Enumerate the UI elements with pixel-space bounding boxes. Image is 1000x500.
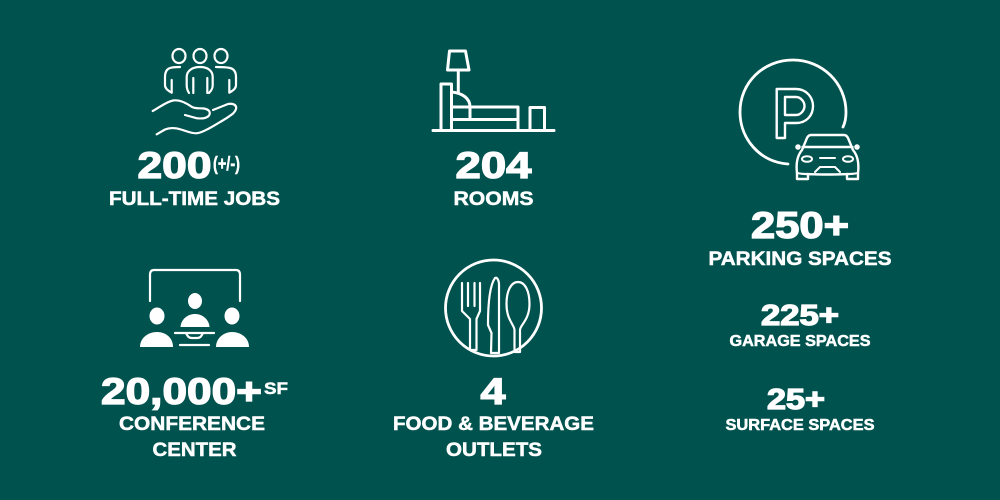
stat: 25+ surface: 25+ [767, 384, 825, 416]
stat: 225+ garage: 225+ [761, 300, 839, 332]
icon: parking circle with car [740, 60, 859, 179]
stat: 20,000+ SF: SF [264, 379, 288, 398]
label: conference center [119, 414, 265, 461]
stat: 204 rooms: 204 [456, 145, 532, 186]
icon: people over open hand [153, 49, 236, 134]
panel: full-time jobs [109, 49, 280, 210]
panel: conference center [101, 270, 288, 461]
stat: 200 jobs [138, 145, 240, 186]
icon: conference table with screen [140, 270, 249, 347]
label: full-time jobs: FULL-TIME JOBS [109, 189, 280, 210]
label: food and beverage outlets: OUTLETS [446, 440, 542, 461]
label: conference center: CONFERENCE [119, 414, 265, 435]
label: food and beverage outlets [393, 414, 594, 461]
label: parking spaces: PARKING SPACES [708, 249, 892, 270]
icon: bed with lamp and nightstand [433, 51, 554, 130]
stat: 200 jobs: (+/-) [213, 153, 240, 175]
panel: food and beverage [393, 260, 594, 461]
panel: rooms [433, 51, 554, 210]
stat: 250+ parking: 250+ [751, 205, 849, 246]
label: rooms: ROOMS [454, 189, 534, 210]
icon: plate with fork, knife, spoon [446, 260, 542, 356]
stat: 20,000+ SF: 20,000+ [101, 371, 262, 412]
label: conference center: CENTER [152, 440, 237, 461]
label: food and beverage outlets: FOOD & BEVERAGE [393, 414, 594, 435]
label: garage spaces: GARAGE SPACES [730, 333, 870, 350]
stat: 200 jobs: 200 [138, 145, 212, 186]
stat: 4 outlets: 4 [480, 371, 506, 412]
panel: parking [708, 60, 892, 434]
label: surface spaces: SURFACE SPACES [726, 417, 874, 434]
